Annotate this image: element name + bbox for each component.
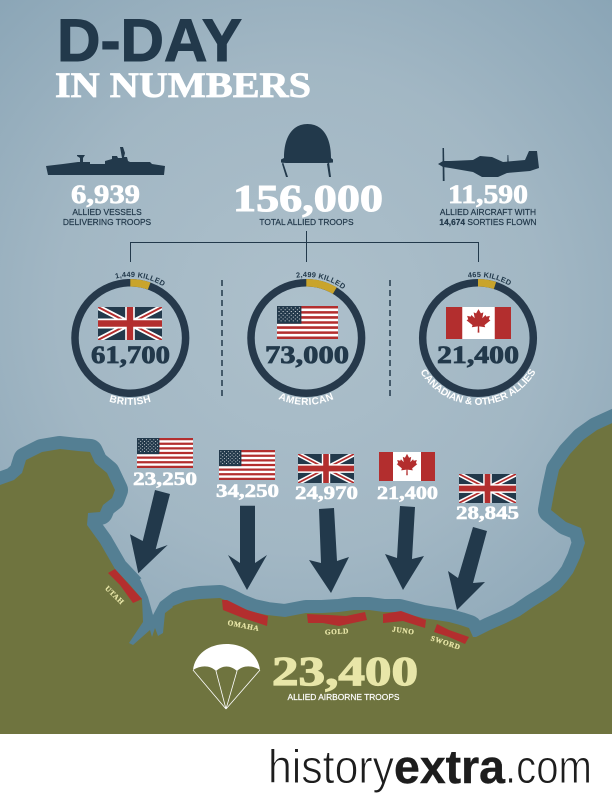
icon: helmet [281,124,333,177]
casualty arc: British [130,283,149,286]
casualty label: American: 2,499 KILLED [296,272,345,288]
number: 61,700: 61,700 [91,342,170,369]
number: 73,000: 73,000 [265,342,349,369]
beach: Juno: JUNO [392,625,415,637]
connector tree [130,231,478,262]
assault: Gold 24,970 [295,454,358,593]
panel: Canadian and other allies [418,272,538,405]
casualty arc: Canadian [478,283,495,285]
flag: US [219,450,275,480]
caption: vessels: DELIVERING TROOPS [63,217,152,227]
logo: historyextra.com: history [268,740,394,793]
number: 23,400: 23,400 [272,648,418,694]
number: 34,250: 34,250 [216,481,279,502]
flag: UK [298,454,354,483]
logo: historyextra.com [268,740,592,793]
flag: US [277,306,338,339]
beach: Sword [430,624,469,652]
arrow [385,506,424,590]
logo: historyextra.com: .com [505,740,592,793]
number: 23,250: 23,250 [133,469,197,490]
airborne stat [193,644,418,709]
number: 24,970: 24,970 [295,483,358,504]
caption: aircraft: 14,674 [439,217,465,227]
beach: Utah: UTAH [103,584,126,607]
beach: Gold: GOLD [325,626,349,637]
label: British: BRITISH [110,395,150,405]
casualty label: British: 1,449 KILLED [115,272,165,286]
footer band [0,734,612,808]
map: coastline [0,415,612,740]
inlet [129,590,173,645]
flag: Canada [379,452,435,481]
beach: Omaha: OMAHA [227,618,260,633]
inlet channel [140,570,173,615]
flag: Canada [446,307,511,339]
beach: Utah [103,569,142,607]
flag: US [137,438,193,468]
icon: ship [46,147,165,175]
assault: Sword 28,845 [448,474,519,610]
stat: allied aircraft [438,148,539,227]
label: Canadian and other allies: CANADIAN & OTHER ALLIES [422,369,535,405]
panel: British [71,272,190,405]
caption: aircraft: SORTIES FLOWN [465,217,537,227]
icon: parachute [193,644,260,709]
number: 6,939: 6,939 [71,180,140,209]
assault: Utah 23,250 [130,438,197,573]
casualty arc: American [306,283,335,291]
casualty label: Canadian: 465 KILLED [468,272,511,285]
number: 21,400: 21,400 [437,342,519,369]
flag: UK [459,474,516,503]
caption: airborne: ALLIED AIRBORNE TROOPS [287,692,400,702]
assault: Omaha 34,250 [216,450,279,590]
caption: total troops: TOTAL ALLIED TROOPS [259,217,354,227]
arrow [309,508,349,593]
dashed dividers [222,280,390,397]
beach: Gold [307,612,367,637]
flag: UK [98,307,162,340]
beach: Omaha [222,600,268,633]
beaches [103,569,469,652]
land [0,415,612,740]
stat: allied vessels [46,147,165,227]
beach: Sword: SWORD [430,634,462,652]
beach: Juno [383,611,426,637]
arrow [448,527,487,610]
title: IN NUMBERS [55,65,311,105]
number: 11,590: 11,590 [448,180,528,209]
caption: vessels: ALLIED VESSELS [72,207,142,217]
arrow [130,490,170,573]
number: 28,845: 28,845 [456,503,519,524]
number: 21,400: 21,400 [377,483,438,504]
title [55,7,311,105]
arrow [228,506,267,590]
caption: aircraft: ALLIED AIRCRAFT WITH [440,207,536,217]
label: American: AMERICAN [278,392,334,405]
number: 156,000: 156,000 [233,178,383,220]
stat: total allied troops [233,124,383,227]
assault: Juno 21,400 [377,452,438,590]
title: D-DAY [57,7,242,74]
icon: plane [438,148,539,181]
logo: historyextra.com: extra [394,740,506,793]
panel: American [247,272,366,405]
